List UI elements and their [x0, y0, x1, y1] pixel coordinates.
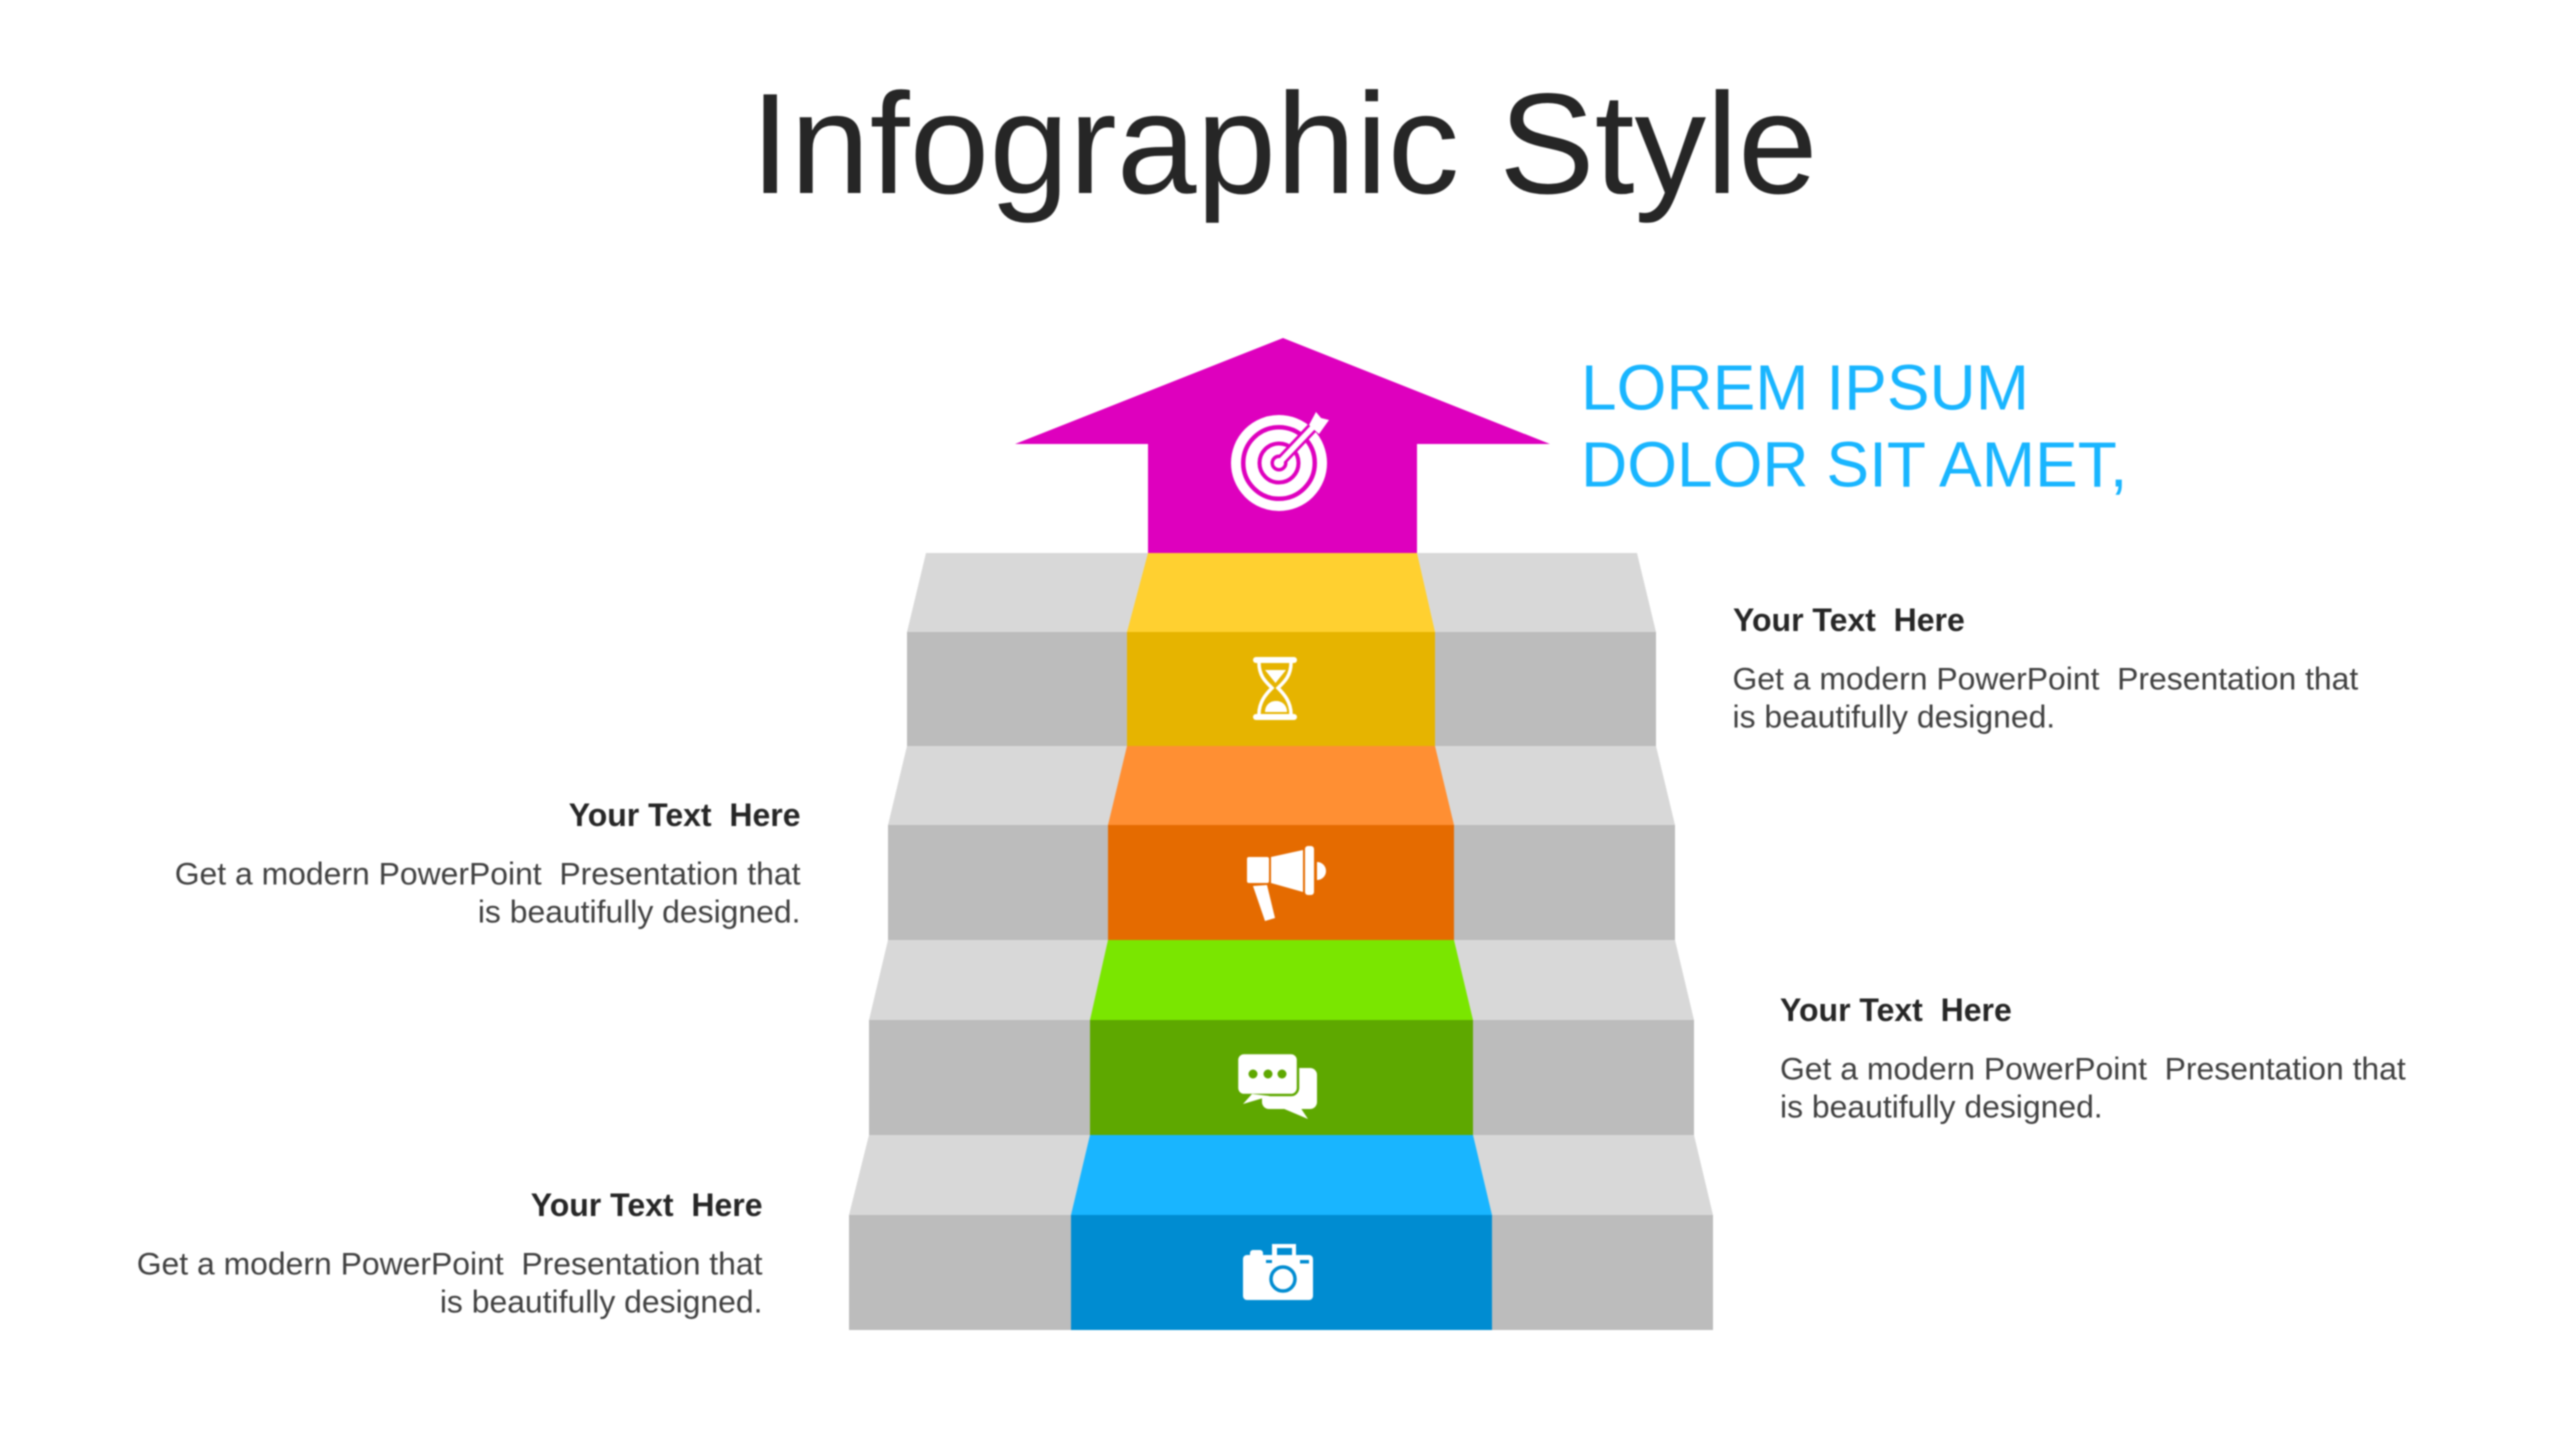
text block: middle left: Your Text Here: [569, 797, 800, 833]
magenta arrow: [1015, 338, 1550, 553]
text block: middle left: is beautifully designed.: [478, 894, 800, 930]
icon: hourglass: [1253, 657, 1297, 720]
text block: top right: Get a modern PowerPoint Presentation that: [1732, 660, 2358, 696]
blue path segment: [1071, 1135, 1492, 1330]
text block: bottom left: is beautifully designed.: [440, 1284, 762, 1320]
icon: megaphone: [1247, 846, 1326, 921]
text block: top right: Your Text Here: [1733, 602, 1965, 638]
yellow path segment: [1127, 553, 1435, 746]
text block: bottom left: Get a modern PowerPoint Presentation that: [137, 1246, 763, 1282]
step 1: gray tread and riser: [907, 553, 1656, 746]
text block: lower right: Get a modern PowerPoint Presentation that: [1780, 1050, 2406, 1086]
callout heading: LOREM IPSUM: [1581, 352, 2029, 424]
icon: chat bubbles: [1237, 1053, 1317, 1119]
text block: lower right: is beautifully designed.: [1780, 1088, 2103, 1124]
text block: bottom left: [137, 1187, 763, 1320]
text block: top right: is beautifully designed.: [1732, 698, 2055, 734]
callout heading: [1581, 352, 2128, 500]
green path segment: [1090, 940, 1473, 1135]
icon: camera: [1243, 1244, 1313, 1300]
text block: top right: [1732, 602, 2358, 734]
text block: lower right: Your Text Here: [1780, 992, 2012, 1028]
step 4: gray tread and riser: [849, 1135, 1713, 1330]
title: Infographic Style: [750, 64, 1818, 224]
staircase: [849, 553, 1713, 1330]
callout heading: DOLOR SIT AMET,: [1581, 428, 2128, 500]
text block: lower right: [1780, 992, 2406, 1124]
icon: target with arrow: [1236, 412, 1329, 506]
step 3: gray tread and riser: [869, 940, 1694, 1135]
orange path segment: [1108, 746, 1454, 940]
step 2: gray tread and riser: [888, 746, 1675, 940]
text block: middle left: Get a modern PowerPoint Presentation that: [175, 856, 801, 892]
text block: middle left: [175, 797, 801, 930]
text block: bottom left: Your Text Here: [531, 1187, 762, 1223]
